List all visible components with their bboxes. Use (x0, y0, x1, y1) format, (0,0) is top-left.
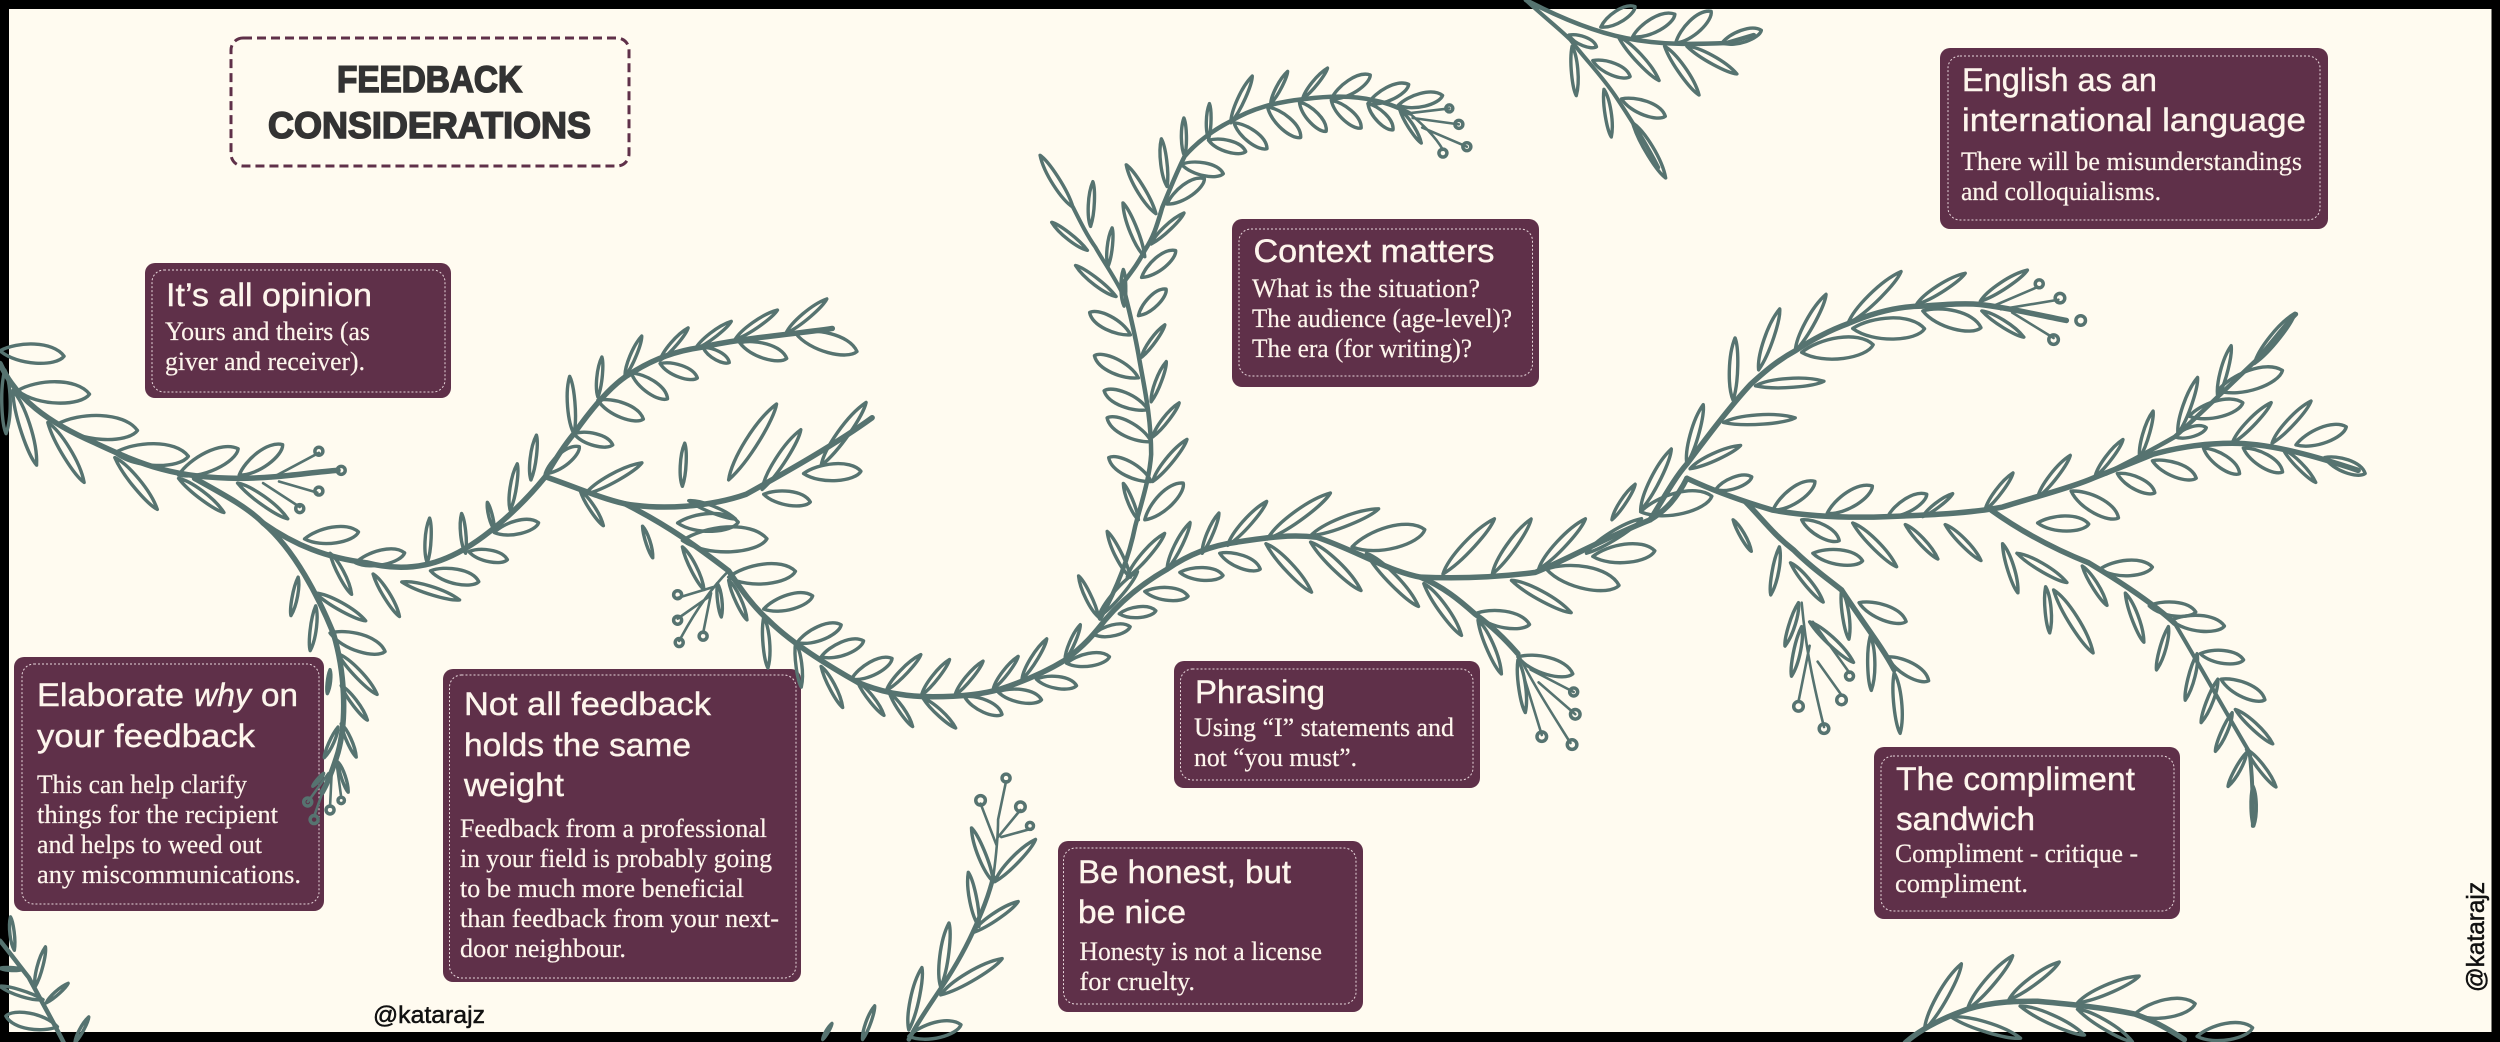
vine: middle upward branch (263, 296, 860, 618)
panel: The compliment sandwich: The compliment (1896, 761, 2135, 797)
vine: small bud branch under middle fork (674, 545, 750, 647)
panel: It's all opinion: It’s all opinion (166, 277, 372, 313)
panel: The compliment sandwich (1874, 747, 2180, 919)
vine: lower right branch two (1991, 510, 2278, 826)
vine: right main branch (1687, 311, 2368, 526)
vine: bottom right sprig (1905, 953, 2254, 1042)
panel: Phrasing: Phrasing (1195, 674, 1325, 710)
body text: Be honest (1080, 937, 1322, 996)
vine: tall central upward branch (1037, 66, 1471, 619)
body text: compliment sandwich (1895, 839, 2138, 898)
panel: English as an international language: English as an (1962, 62, 2157, 98)
vine: lower right branch one with buds (1732, 502, 1983, 734)
vine: second fork to the right (579, 399, 872, 527)
body text: Not all feedback: in your field is probably going (460, 844, 772, 873)
vine: downward sprig with buds, centre right (1421, 577, 1580, 749)
body text: Not all feedback: to be much more beneficial (460, 874, 744, 903)
body text: Phrasing: not “you must”. (1194, 743, 1357, 772)
body text: English: There will be misunderstandings (1961, 147, 2302, 176)
panel: Be honest, but be nice: Be honest, but (1078, 854, 1291, 890)
panel: Elaborate why on your feedback: why (194, 677, 253, 713)
body text: Elaborate: any miscommunications. (37, 860, 301, 889)
vine: top-left sprig (0, 340, 345, 522)
vine: top centre sprig (1526, 0, 1763, 180)
panel: Elaborate why on your feedback: your feedback (37, 718, 256, 754)
body text: English (1961, 147, 2302, 206)
title box (231, 38, 629, 166)
panel: It's all opinion (145, 263, 451, 398)
vine: bottom left sprig (0, 917, 91, 1042)
title box: CONSIDERATIONS (268, 105, 591, 146)
body text: Not all feedback: Feedback from a professional (460, 814, 767, 843)
panel: Elaborate why on your feedback: Elaborate (37, 677, 184, 713)
body text: Be honest: Honesty is not a license (1080, 937, 1322, 966)
body text: compliment sandwich: compliment. (1895, 869, 2028, 898)
panel: Context matters: Context matters (1254, 233, 1494, 269)
panel: Be honest, but be nice (1058, 841, 1363, 1012)
panel: Phrasing (1174, 661, 1480, 788)
body text: Context matters (1252, 274, 1512, 363)
body text: It's all opinion (165, 317, 370, 376)
panel: Not all feedback holds the same weight: holds the same (464, 727, 691, 763)
title box: FEEDBACK (337, 59, 522, 100)
panel: English as an international language: international language (1962, 102, 2306, 138)
panel: The compliment sandwich: sandwich (1896, 801, 2035, 837)
body text: Elaborate: This can help clarify (37, 770, 247, 799)
body text: Elaborate: and helps to weed out (37, 830, 263, 859)
vine: right upper branch (1609, 267, 2085, 521)
body text: Phrasing: Using “I” statements and (1194, 713, 1454, 742)
credit: rotated handle: @katarajz (2462, 882, 2490, 992)
panel: Not all feedback holds the same weight (443, 669, 801, 982)
panel: Elaborate why on your feedback (14, 657, 324, 911)
panel: Not all feedback holds the same weight: weight (463, 767, 564, 803)
body text: Not all feedback (460, 814, 779, 963)
body text: English: and colloquialisms. (1961, 177, 2161, 206)
vine: long central vine (545, 477, 1687, 730)
body text: Context matters: What is the situation? (1252, 274, 1480, 303)
vine: left descending branch (195, 478, 388, 824)
body text: Phrasing (1194, 713, 1454, 772)
panel: Context matters (1232, 219, 1539, 387)
body text: Not all feedback: door neighbour. (460, 934, 626, 963)
body text: compliment sandwich: Compliment - critique - (1895, 839, 2138, 868)
body text: Context matters: The era (for writing)? (1252, 334, 1472, 363)
body text: It's all opinion: Yours and theirs (as (165, 317, 370, 346)
body text: Be honest: for cruelty. (1080, 967, 1195, 996)
panel: Be honest, but be nice: be nice (1078, 894, 1186, 930)
body text: Elaborate (37, 770, 301, 889)
body text: It's all opinion: giver and receiver). (165, 347, 365, 376)
body text: Context matters: The audience (age-level)? (1252, 304, 1512, 333)
panel: English as an international language (1940, 48, 2328, 229)
panel: Not all feedback holds the same weight: Not all feedback (464, 686, 712, 722)
vine: bottom centre sprig (821, 774, 1038, 1042)
body text: Elaborate: things for the recipient (37, 800, 279, 829)
body text: Not all feedback: than feedback from your next- (460, 904, 779, 933)
credit: bottom handle: @katarajz (373, 1002, 485, 1029)
panel: Elaborate why on your feedback: on (261, 677, 298, 713)
